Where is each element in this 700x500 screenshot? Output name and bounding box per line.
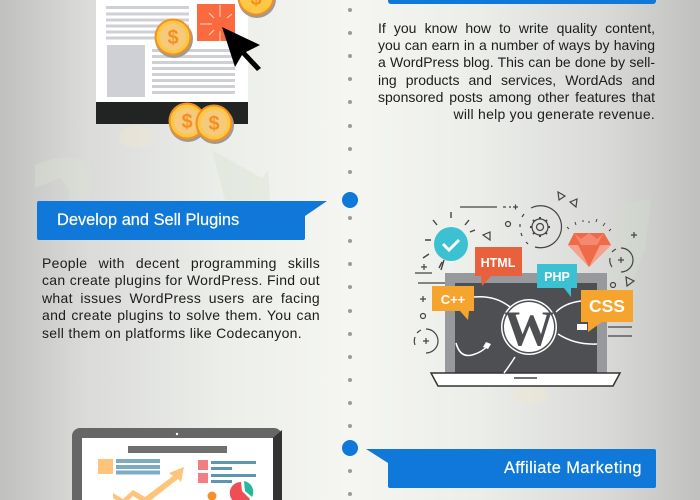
icon: gear — [520, 206, 561, 248]
text: Develop and Sell Plugins — [57, 211, 239, 229]
text: plugins: and create plugins to solve them. You can — [42, 307, 320, 323]
decorative line glyphs — [414, 192, 637, 353]
text: plugins — [42, 255, 320, 341]
text: blogging: will help you generate revenue. — [453, 106, 655, 122]
icon: cursor arrow — [222, 27, 261, 71]
icon: coin — [154, 18, 193, 58]
icon: speech bubble C++ — [432, 286, 474, 320]
text: plugins: sell them on platforms like Codecanyon. — [42, 325, 302, 341]
icon: speech bubble PHP — [537, 264, 577, 297]
top heading bar remnant — [388, 0, 656, 4]
text: blogging: sponsored posts among other features that — [378, 89, 655, 105]
icon: speech bubble PHP: PHP — [544, 270, 570, 284]
text: plugins: can create plugins for WordPress. Find out — [42, 272, 320, 288]
text: blogging: If you know how to write quality content, — [378, 20, 655, 36]
icon: speech bubble HTML — [475, 247, 522, 286]
icon: speech bubble C++: C++ — [441, 292, 466, 307]
logo: WordPress: W — [504, 300, 554, 356]
text: blogging: ing products and services, WordAds and — [378, 72, 655, 88]
icon: coin: $ — [181, 111, 193, 133]
text: Affiliate Marketing — [504, 459, 642, 477]
text: plugins: People with decent programming skills — [42, 255, 320, 271]
icon: coin: $ — [167, 27, 179, 49]
icon: speech bubble CSS: CSS — [589, 296, 625, 316]
icon: gem — [567, 219, 611, 267]
icon: coin: $ — [208, 113, 220, 135]
icon: check badge — [423, 212, 475, 270]
icon: speech bubble CSS — [581, 290, 633, 332]
icon: coin — [238, 0, 276, 18]
text: blogging: you can earn in a number of ways by having — [378, 37, 655, 53]
text: blogging: a WordPress blog. This can be done by sell- — [378, 54, 655, 70]
icon: speech bubble HTML: HTML — [481, 256, 516, 270]
text: blogging — [378, 20, 655, 122]
icon: coin — [196, 104, 234, 144]
text: plugins: what issues WordPress users are facing — [42, 290, 320, 306]
icon: coin — [168, 102, 207, 142]
